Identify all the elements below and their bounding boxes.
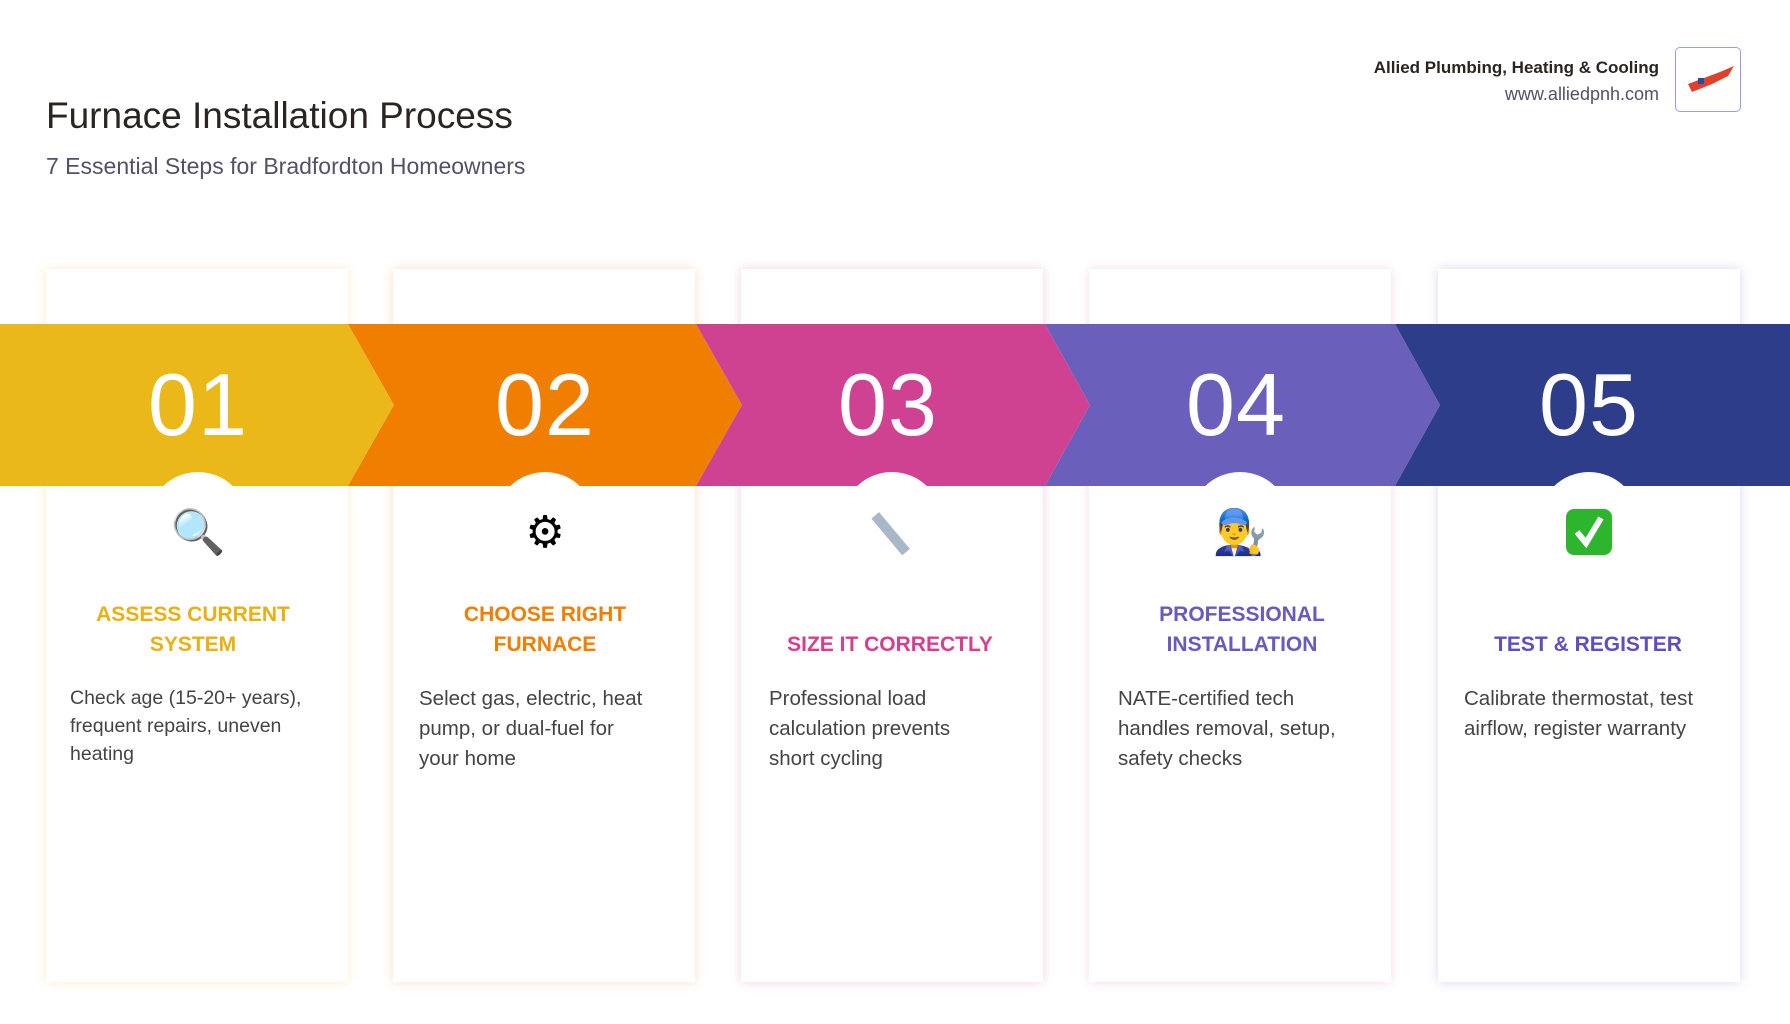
body 2: Select gas, electric, heat pump, or dual-fuel for <box>419 687 642 740</box>
heading 1: ASSESS CURRENT <box>96 603 290 626</box>
body 4: NATE-certified tech handles removal, setup, safety checks <box>1118 687 1336 770</box>
icon: gear: ⚙ <box>525 507 565 558</box>
heading 2: FURNACE <box>494 633 596 656</box>
heading 2: CHOOSE RIGHT <box>464 603 626 626</box>
heading 3: SIZE IT CORRECTLY <box>787 633 993 656</box>
heading 5: TEST & REGISTER <box>1494 633 1682 656</box>
brand block: www.alliedpnh.com <box>1505 84 1659 104</box>
logo <box>1675 47 1741 112</box>
title: Furnace Installation Process <box>46 95 513 136</box>
icon: check <box>1566 509 1612 555</box>
body 3: Professional load calculation prevents short cycling <box>769 687 950 770</box>
card 3 <box>741 269 1043 982</box>
brand block <box>1374 58 1659 104</box>
body 5: Calibrate thermostat, test airflow, register warranty <box>1464 687 1693 740</box>
heading 1 <box>96 603 290 656</box>
number 02: 02 <box>495 355 595 454</box>
subtitle: 7 Essential Steps for Bradfordton Homeowners <box>46 153 525 179</box>
card 2 <box>393 269 695 982</box>
body 2: your home <box>419 747 516 770</box>
brand block: Allied Plumbing, Heating & Cooling <box>1374 58 1659 77</box>
body 2 <box>419 687 642 770</box>
card 5 <box>1438 269 1740 982</box>
card 4 <box>1089 269 1391 982</box>
body 1: Check age (15-20+ years), frequent repairs, uneven heating <box>70 687 301 765</box>
number 04: 04 <box>1186 355 1286 454</box>
icon: technician: 👨‍🔧 <box>1213 507 1267 558</box>
heading 4: INSTALLATION <box>1167 633 1317 656</box>
card 1 <box>46 269 348 982</box>
heading 4 <box>1159 603 1325 656</box>
heading 2 <box>464 603 626 656</box>
heading 1: SYSTEM <box>150 633 236 656</box>
heading 4: PROFESSIONAL <box>1159 603 1325 626</box>
number 03: 03 <box>838 355 938 454</box>
icon: ruler <box>872 512 910 556</box>
number 05: 05 <box>1539 355 1639 454</box>
icon: magnifier: 🔍 <box>171 507 225 558</box>
number 01: 01 <box>148 355 248 454</box>
